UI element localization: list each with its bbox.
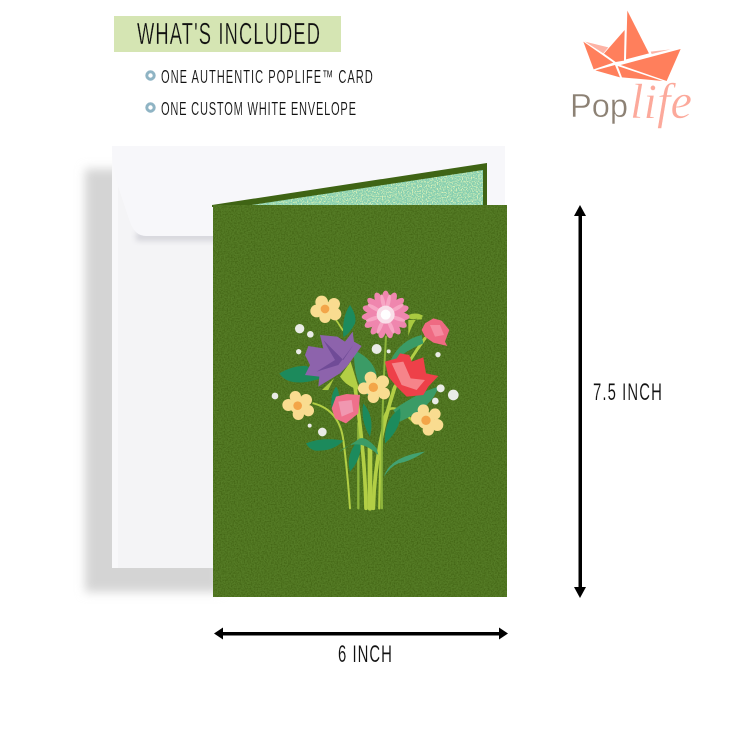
icon: origami boat <box>583 11 681 81</box>
envelope shadow <box>85 169 220 592</box>
list item: poplife card: ONE AUTHENTIC POPLIFE™ CARD <box>161 67 373 88</box>
stems <box>313 318 425 508</box>
arrow: height <box>574 205 586 598</box>
flower: pink daisy <box>361 291 410 339</box>
arrow: width <box>214 628 508 640</box>
leaves <box>279 366 323 383</box>
label: 7.5 inch: 7.5 INCH <box>593 380 662 406</box>
flower: yellow top left <box>310 296 341 323</box>
logo: poplife: life <box>630 73 692 129</box>
envelope body <box>112 146 505 568</box>
flower: yellow center <box>358 372 390 403</box>
envelope flap <box>112 146 505 236</box>
glitter card interior <box>245 170 483 206</box>
flower: red tulip <box>385 353 438 397</box>
label: 6 inch: 6 INCH <box>338 642 392 668</box>
flower bouquet <box>272 291 459 508</box>
flower: carnation lower <box>332 394 360 423</box>
flower: purple <box>305 332 362 387</box>
flap shadow <box>136 232 226 241</box>
heading: what's included: WHAT'S INCLUDED <box>137 17 320 51</box>
envelope <box>85 146 505 592</box>
list item: envelope: ONE CUSTOM WHITE ENVELOPE <box>161 99 356 120</box>
leaf and bud highlights <box>408 317 422 336</box>
logo: poplife <box>570 11 692 129</box>
logo: poplife: Pop <box>570 87 628 124</box>
flower: yellow left <box>282 391 314 420</box>
card back panel <box>212 163 487 207</box>
flower: carnation top <box>422 318 449 346</box>
flower: yellow right <box>411 404 443 436</box>
card front <box>213 205 507 597</box>
white dots <box>272 324 459 436</box>
